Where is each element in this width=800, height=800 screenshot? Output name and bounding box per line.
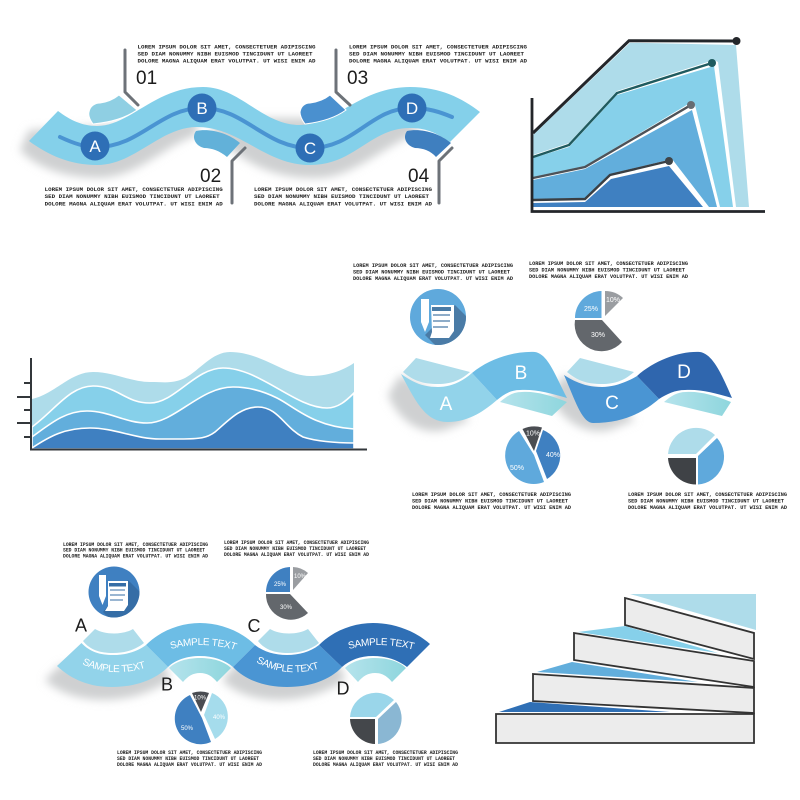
text block right bottom [628,491,788,511]
label sample text A: SAMPLE TEXT [83,658,144,672]
text block A: DOLORE MAGNA ALIQUAM ERAT VOLUTPAT. UT WISI ENIM AD [63,553,208,559]
segment D: D [677,362,691,383]
text block right bottom: DOLORE MAGNA ALIQUAM ERAT VOLUTPAT. UT WISI ENIM AD [628,504,788,511]
letter D: D [336,678,350,698]
pie: 50 40 10: 50% [181,726,194,732]
step wedge 2 [578,626,718,653]
pie: 25 10 30: 30% [280,605,293,611]
node D [398,94,426,122]
text block C: LOREM IPSUM DOLOR SIT AMET, CONSECTETUER ADIPISCING [224,540,369,546]
text block 01 [138,44,316,64]
text block D: SED DIAM NONUMMY NIBH EUISMOD TINCIDUNT UT LAOREET [313,756,455,762]
letter B: B [161,674,173,694]
ribbon back right top [567,358,634,384]
tab 02 [194,130,240,157]
pie: 25 10 30: 10% [294,574,307,580]
segment D [637,352,732,399]
pie: 50 40 10: 10% [526,430,540,438]
text block 01: DOLORE MAGNA ALIQUAM ERAT VOLUTPAT. UT WISI ENIM AD [138,57,316,64]
node B [188,94,216,122]
segment D [319,623,430,667]
line series 4 [533,157,673,200]
pie: 50 40 10: 10% [194,696,207,702]
text block 04: DOLORE MAGNA ALIQUAM ERAT VOLUTPAT. UT WISI ENIM AD [254,200,433,207]
pie: three part [668,428,724,485]
text block C: SED DIAM NONUMMY NIBH EUISMOD TINCIDUNT UT LAOREET [224,546,366,552]
text block left top [353,262,514,282]
pie: 50 40 10 [175,692,228,744]
text block 03: LOREM IPSUM DOLOR SIT AMET, CONSECTETUER ADIPISCING [349,44,528,50]
wave axes and ticks [17,358,367,450]
pie: 50 40 10: 40% [546,452,560,459]
step box 3 [533,674,754,713]
bottom arc B [169,658,231,682]
text block 04: LOREM IPSUM DOLOR SIT AMET, CONSECTETUER ADIPISCING [254,186,433,193]
text block 02: DOLORE MAGNA ALIQUAM ERAT VOLUTPAT. UT WISI ENIM AD [45,200,223,207]
ribbon shadow [20,118,420,178]
ribbon back left top [403,358,470,384]
chart: stacked line area top right [532,37,765,212]
shadow under ribbons [388,375,635,431]
bottom arc D [345,658,406,682]
text block left bottom [412,491,572,511]
ribbon centre line [60,108,452,148]
node B: B [196,99,208,118]
text block left top: DOLORE MAGNA ALIQUAM ERAT VOLUTPAT. UT WISI ENIM AD [353,275,514,282]
letter A: A [75,616,87,636]
text block 02: LOREM IPSUM DOLOR SIT AMET, CONSECTETUER ADIPISCING [45,186,223,193]
wave layer 2 [32,368,354,449]
wave layer 4 [32,407,354,449]
panel: curved sample text ribbon [44,540,458,768]
step box 2 [574,633,754,687]
pie: 25 10 30: 25% [584,306,598,313]
label sample text B: SAMPLE TEXT [170,638,238,650]
text block B: SED DIAM NONUMMY NIBH EUISMOD TINCIDUNT UT LAOREET [117,756,259,762]
segment A [57,643,168,687]
segment A: A [440,394,453,415]
text block D [313,750,458,768]
text block C [224,540,369,558]
tab 03 [300,95,346,124]
text block right top: SED DIAM NONUMMY NIBH EUISMOD TINCIDUNT UT LAOREET [529,266,686,274]
label sample text C: SAMPLE TEXT [257,657,318,672]
text block 04: SED DIAM NONUMMY NIBH EUISMOD TINCIDUNT UT LAOREET [254,193,430,200]
pie: 25 10 30: 10% [606,297,620,304]
segment C: C [605,393,619,414]
chart: wave area chart [17,352,367,450]
text block left bottom: DOLORE MAGNA ALIQUAM ERAT VOLUTPAT. UT WISI ENIM AD [412,504,572,511]
number 04: 04 [408,166,430,187]
step wedge 3 [537,662,698,682]
text block D: DOLORE MAGNA ALIQUAM ERAT VOLUTPAT. UT WISI ENIM AD [313,762,458,768]
chart: stair steps [496,594,756,743]
tab 04 [405,130,451,157]
tab 01 [89,95,137,124]
text block 03 [349,44,528,64]
top arc A [83,629,144,653]
axes [532,98,765,212]
text block left top: SED DIAM NONUMMY NIBH EUISMOD TINCIDUNT UT LAOREET [353,268,511,276]
pie: 25 10 30 [575,291,623,351]
connector lines [125,50,452,203]
line series 2 [533,59,716,157]
segment C [564,375,659,423]
wave layer 3 [32,387,354,449]
segment B [146,623,255,667]
ribbon back right bottom [664,392,731,416]
text block right top: LOREM IPSUM DOLOR SIT AMET, CONSECTETUER ADIPISCING [529,260,689,267]
pie: 25 10 30: 30% [591,332,605,339]
top arc C [258,629,319,653]
text block 02 [45,186,223,207]
panel: wavy ribbon timeline 01-04 [20,44,528,207]
text block B: DOLORE MAGNA ALIQUAM ERAT VOLUTPAT. UT WISI ENIM AD [117,762,262,768]
text block left bottom: LOREM IPSUM DOLOR SIT AMET, CONSECTETUER ADIPISCING [412,491,572,498]
node A [80,132,110,160]
pie: 25 10 30 [266,567,308,620]
node C: C [304,139,316,158]
step wedge 1 [630,594,756,630]
area layer 1 [533,43,749,207]
pie: 50 40 10: 50% [510,465,524,472]
node C [296,134,324,162]
icon: document and pen [410,289,466,345]
text block B [117,750,262,768]
text block B: LOREM IPSUM DOLOR SIT AMET, CONSECTETUER ADIPISCING [117,750,262,756]
ribbon band [29,87,480,165]
pie: 25 10 30: 25% [274,582,287,588]
text block D: LOREM IPSUM DOLOR SIT AMET, CONSECTETUER ADIPISCING [313,750,458,756]
area layer 2 [533,60,736,207]
pie: three part [350,693,402,744]
text block right bottom: LOREM IPSUM DOLOR SIT AMET, CONSECTETUER ADIPISCING [628,491,788,498]
segment C [233,645,342,687]
text block right bottom: SED DIAM NONUMMY NIBH EUISMOD TINCIDUNT UT LAOREET [628,498,785,504]
icon: document and pen [88,566,140,618]
segment B [472,352,567,400]
text block 01: LOREM IPSUM DOLOR SIT AMET, CONSECTETUER ADIPISCING [138,44,316,50]
text block right top: DOLORE MAGNA ALIQUAM ERAT VOLUTPAT. UT WISI ENIM AD [529,273,689,280]
label sample text D: SAMPLE TEXT [348,638,415,650]
text block right top [529,260,689,280]
node D: D [406,99,418,118]
number 03: 03 [347,68,368,89]
text block 04 [254,186,433,207]
number 02: 02 [200,166,221,187]
pie: 50 40 10 [505,426,560,484]
segment A [401,373,497,422]
step box 1 [625,598,754,659]
ribbon back left bottom [500,392,567,416]
segment B: B [515,363,527,384]
text block 02: SED DIAM NONUMMY NIBH EUISMOD TINCIDUNT UT LAOREET [45,193,220,200]
node A: A [89,137,101,156]
text block A [63,542,208,559]
ribbon shadow [45,665,345,700]
step wedge 4 [499,702,670,712]
text block left top: LOREM IPSUM DOLOR SIT AMET, CONSECTETUER ADIPISCING [353,262,514,269]
pie: 50 40 10: 40% [213,715,226,721]
line series 3 [533,101,695,178]
number 01: 01 [136,68,157,89]
text block C: DOLORE MAGNA ALIQUAM ERAT VOLUTPAT. UT WISI ENIM AD [224,552,369,558]
letter C: C [248,616,260,636]
panel: twisted ribbons with icon and pies [353,260,788,511]
area layer 4 [533,159,709,207]
text block A: LOREM IPSUM DOLOR SIT AMET, CONSECTETUER ADIPISCING [63,542,208,548]
text block 03: DOLORE MAGNA ALIQUAM ERAT VOLUTPAT. UT WISI ENIM AD [349,57,528,64]
wave layer 1 [32,352,354,449]
text block 01: SED DIAM NONUMMY NIBH EUISMOD TINCIDUNT UT LAOREET [138,50,313,58]
line series 1 [533,37,740,133]
text block left bottom: SED DIAM NONUMMY NIBH EUISMOD TINCIDUNT UT LAOREET [412,498,569,504]
step box 4 [496,714,754,743]
area layer 3 [533,103,720,207]
text block 03: SED DIAM NONUMMY NIBH EUISMOD TINCIDUNT UT LAOREET [349,50,525,58]
text block A: SED DIAM NONUMMY NIBH EUISMOD TINCIDUNT UT LAOREET [63,548,205,554]
